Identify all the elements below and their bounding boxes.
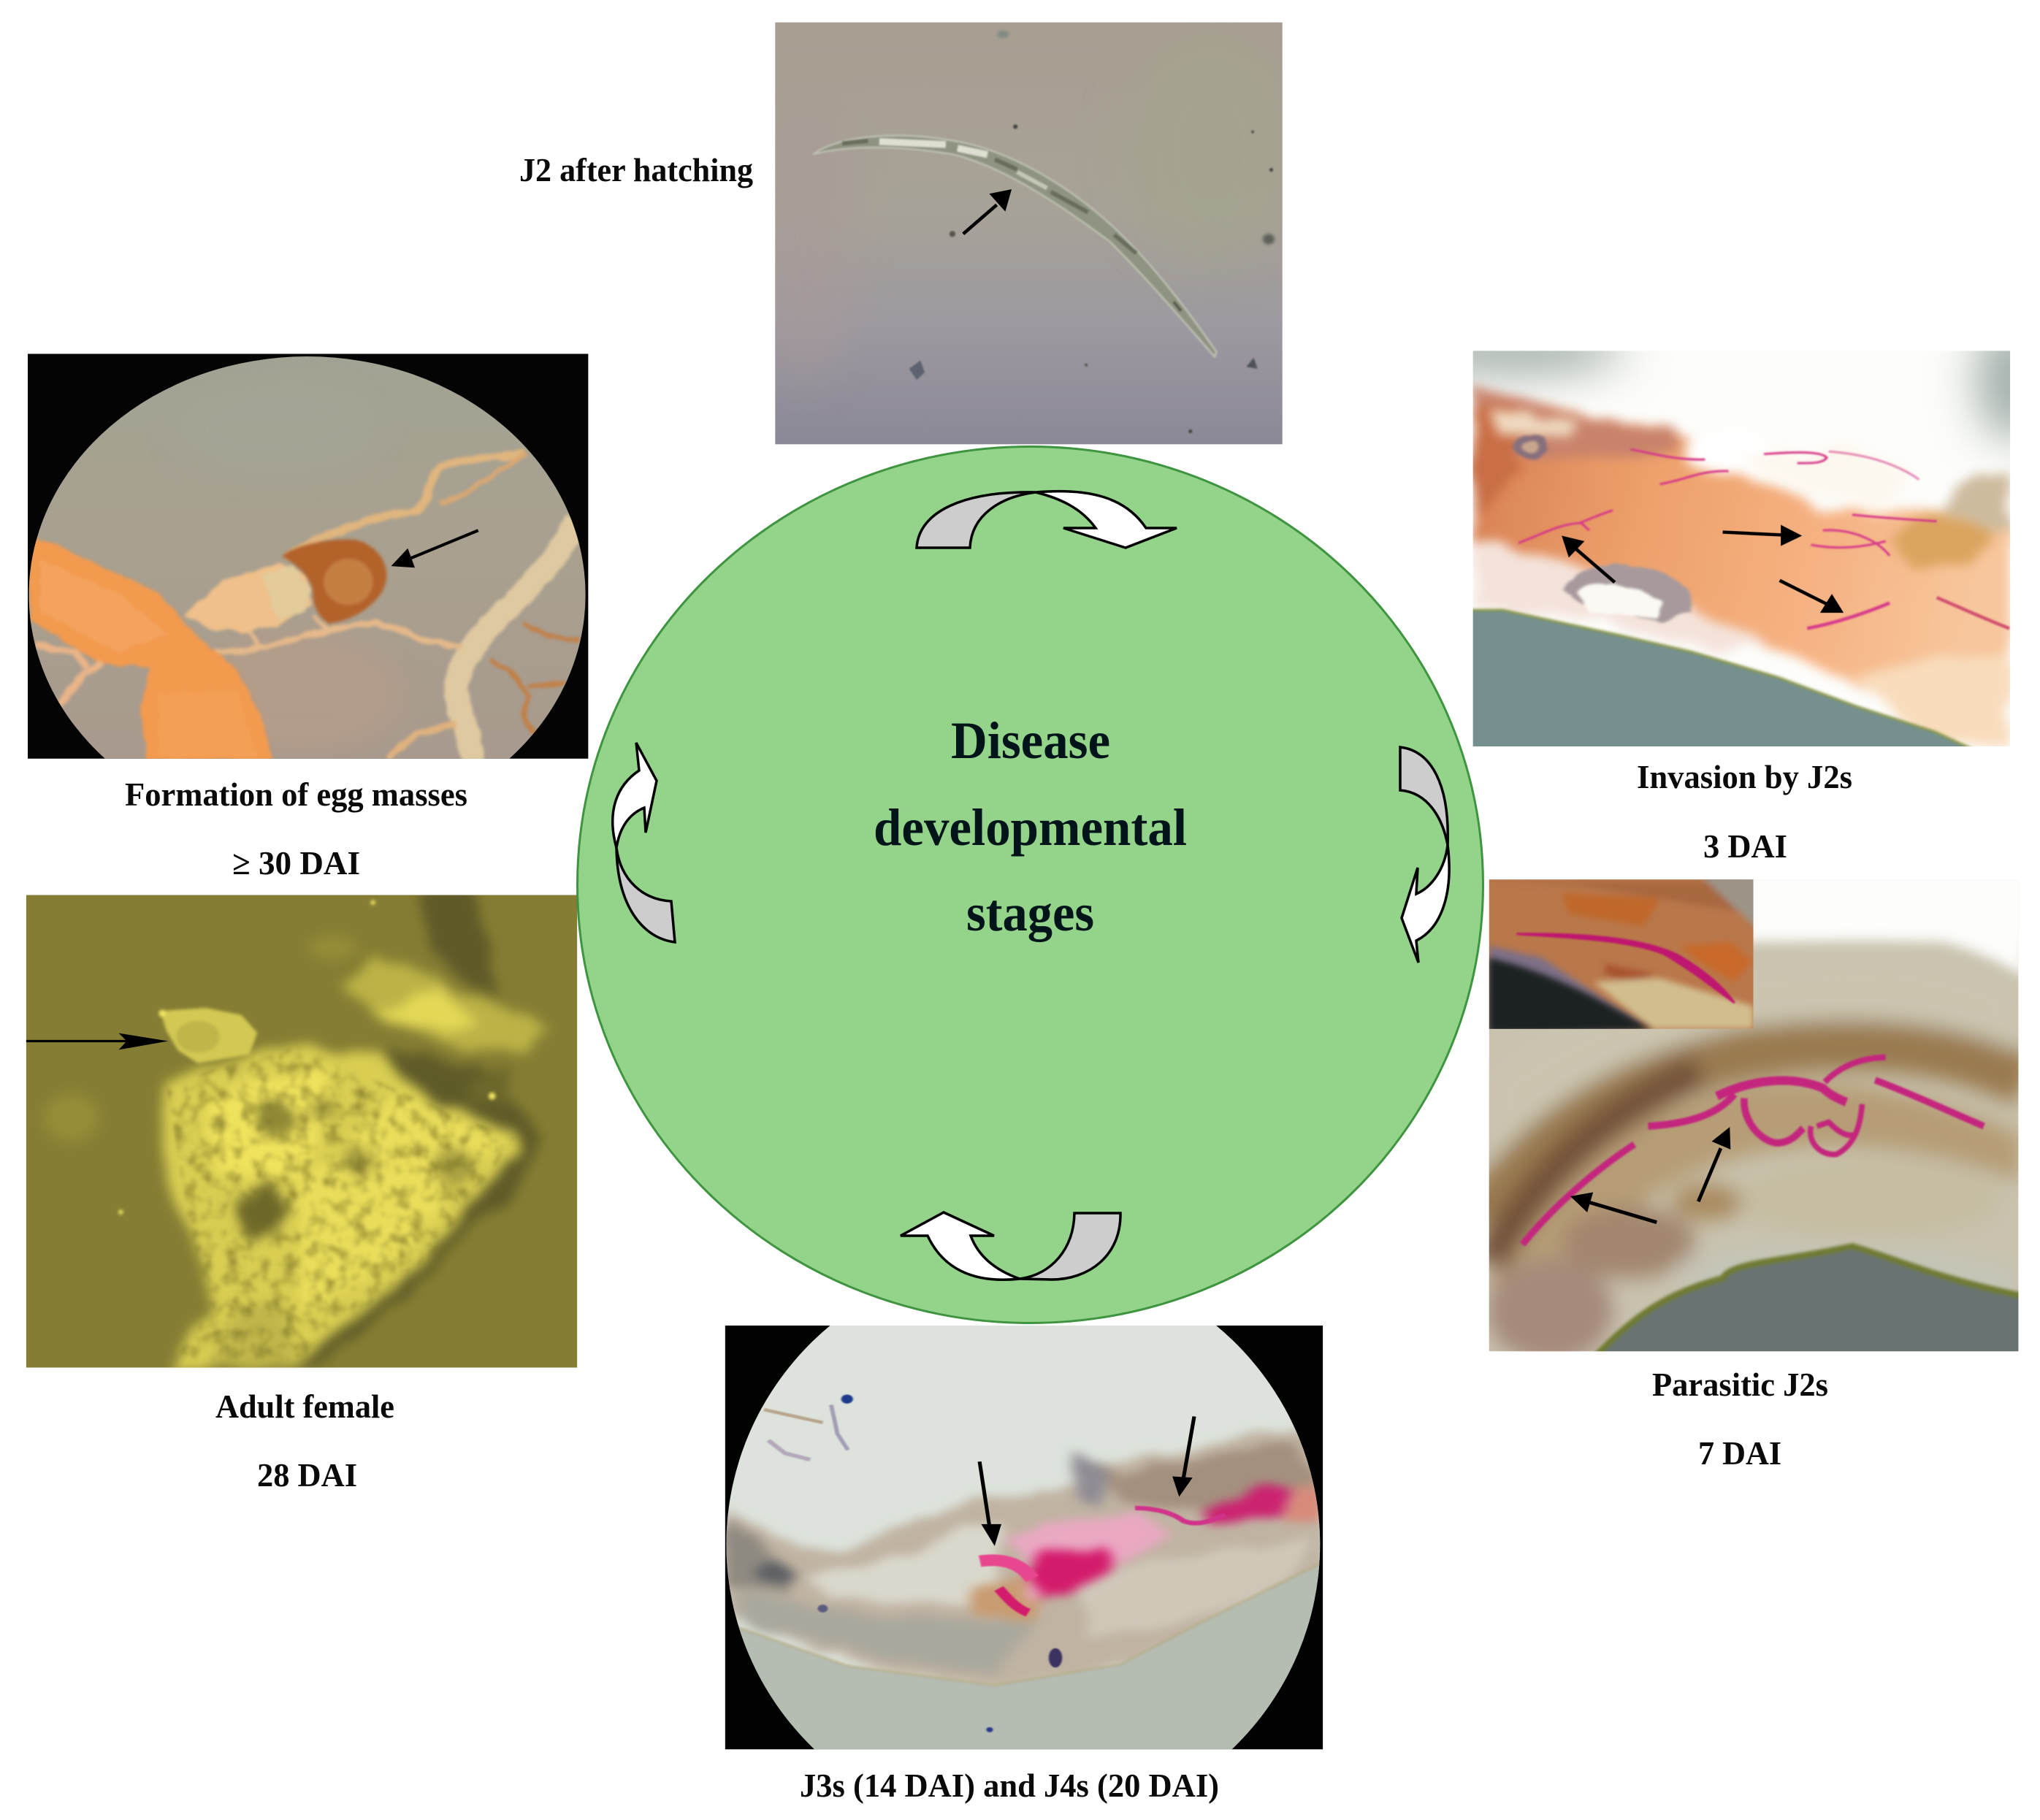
tissue texture — [167, 1047, 515, 1359]
debris — [764, 1394, 1062, 1732]
label: adult female — [215, 1388, 394, 1494]
label: invasion by J2s: 3 DAI — [1703, 827, 1787, 865]
pink worms — [1518, 449, 2009, 628]
pink stained tissue — [1003, 1515, 1175, 1598]
arrows — [1570, 1127, 1730, 1223]
inset photo — [1489, 873, 1758, 1034]
label: adult female: 28 DAI — [257, 1456, 357, 1494]
arrow — [963, 189, 1012, 234]
dark background under root — [1593, 1247, 2025, 1358]
fine root branches — [491, 623, 580, 736]
tan inner band — [1491, 1082, 2021, 1339]
title: disease developmental stages: stages — [966, 884, 1094, 942]
dark background below root — [1464, 611, 1982, 754]
dark spike — [412, 888, 499, 995]
title: disease developmental stages: Disease — [951, 711, 1110, 770]
orange lobes — [30, 535, 273, 760]
arrows — [979, 1416, 1194, 1546]
label: parasitic J2s — [1652, 1366, 1828, 1472]
panel: invasion by J2s photo — [1405, 318, 2040, 754]
title: disease developmental stages: developmental — [874, 798, 1187, 857]
arrow: left cycle arrow — [613, 743, 675, 942]
arrow: right cycle arrow — [1400, 747, 1449, 963]
label: formation of egg masses: Formation of egg masses — [125, 776, 467, 813]
panel: J2 after hatching photo — [757, 23, 1296, 444]
label: formation of egg masses: ≥ 30 DAI — [232, 844, 360, 882]
root hair bubble — [1513, 435, 1692, 623]
upper root — [285, 454, 527, 556]
arrow: top cycle arrow — [917, 492, 1177, 548]
female body — [118, 901, 496, 1215]
arrows — [1562, 525, 1844, 613]
nematode body — [813, 136, 1217, 357]
title: disease developmental stages — [874, 711, 1187, 942]
pale body — [184, 563, 313, 632]
egg mass — [282, 540, 386, 624]
label: parasitic J2s: Parasitic J2s — [1652, 1366, 1828, 1403]
arrow — [391, 530, 478, 567]
right pale root — [456, 519, 576, 764]
panel: formation of egg masses photo — [28, 353, 588, 765]
label: formation of egg masses — [125, 776, 467, 882]
label: J2 after hatching: J2 after hatching — [519, 151, 753, 188]
brown band — [1483, 1045, 2025, 1223]
arrow — [26, 1033, 168, 1049]
label: invasion by J2s — [1637, 758, 1852, 865]
label: J3s and J4s: J3s (14 DAI) and J4s (20 DAI) — [800, 1767, 1219, 1804]
root body — [718, 1427, 1326, 1689]
grey field below root — [718, 1563, 1330, 1753]
tissue band — [1473, 391, 2010, 735]
label: invasion by J2s: Invasion by J2s — [1637, 758, 1852, 795]
panel: parasitic J2s photo — [1483, 865, 2037, 1363]
label: adult female: Adult female — [215, 1388, 394, 1425]
magenta worms — [1522, 1058, 1984, 1244]
panel: central green circle — [577, 447, 1483, 1323]
panel: adult female photo — [26, 888, 577, 1368]
arrow: bottom cycle arrow — [901, 1212, 1120, 1280]
label: parasitic J2s: 7 DAI — [1698, 1434, 1781, 1472]
upper tissue — [337, 955, 546, 1050]
panel: J3s and J4s photo — [718, 1326, 1330, 1753]
main tissue — [162, 1043, 522, 1368]
